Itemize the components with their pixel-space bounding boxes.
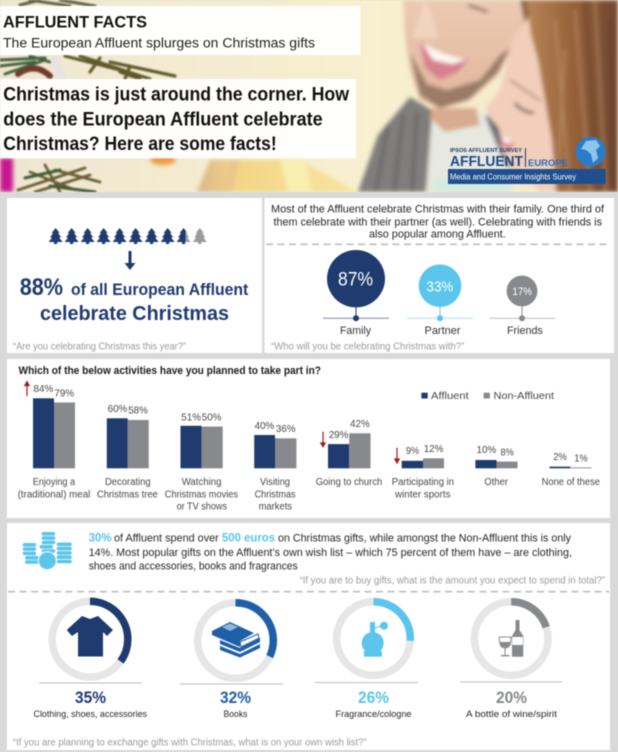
bars: watching movies: Christmas movies bbox=[165, 489, 238, 500]
bars: going to church: 29% bbox=[329, 429, 348, 441]
survey question: “If you are planning to exchange gifts with Christmas, what is on your own wish list?” bbox=[13, 738, 367, 749]
bars: other bbox=[475, 444, 518, 488]
header photo: couple with Christmas gift bbox=[0, 0, 618, 192]
arrow: red down, winter sports bbox=[395, 448, 399, 463]
bubble: partner 33%: Partner bbox=[424, 325, 461, 337]
logo: Affluent Europe: EUROPE bbox=[528, 158, 568, 169]
bars: winter sports bbox=[392, 443, 454, 500]
bars: winter sports: 9% bbox=[406, 445, 419, 457]
intro text bbox=[271, 204, 605, 241]
gift: clothing 35% bbox=[34, 601, 147, 720]
bars: enjoying a meal: 84% bbox=[34, 383, 53, 395]
bubble: friends 17% bbox=[490, 276, 555, 337]
text: spending: on Christmas gifts, while amongst the Non-Affluent this is only bbox=[278, 532, 571, 544]
bars: going to church: 42% bbox=[350, 418, 370, 430]
icon: wine bottle and glass bbox=[499, 620, 523, 657]
text: spending: 30% bbox=[89, 532, 112, 544]
legend: Non-Affluent bbox=[494, 390, 554, 402]
intro text: Most of the Affluent celebrate Christmas with their family. One third of bbox=[271, 204, 605, 216]
logo: Affluent Europe: IPSOS AFFLUENT SURVEY bbox=[450, 148, 522, 154]
bars: decorating tree: 60% bbox=[108, 403, 127, 415]
bars: winter sports: winter sports bbox=[394, 489, 450, 500]
survey question: “Who will you be celebrating Christmas with?” bbox=[271, 341, 464, 352]
header intro text box bbox=[0, 79, 356, 158]
icon: stacks of coins bbox=[23, 532, 72, 570]
headline: 88 percent: of all European Affluent bbox=[71, 280, 249, 299]
headline: 88 percent: celebrate Christmas bbox=[40, 302, 229, 325]
bars: enjoying a meal: (traditional) meal bbox=[18, 489, 90, 500]
legend bbox=[421, 390, 554, 402]
icon: t-shirt bbox=[67, 616, 113, 656]
gift: wine 20% bbox=[460, 602, 562, 720]
bars: enjoying a meal: 79% bbox=[54, 388, 74, 400]
bars: watching movies bbox=[165, 412, 238, 513]
chart title: Which of the below activities have you planned to take part in? bbox=[18, 365, 321, 377]
bubble: family 87%: 87% bbox=[338, 270, 373, 291]
gift: clothing 35%: Clothing, shoes, accessories bbox=[34, 709, 147, 720]
logo: Affluent Europe: Media and Consumer Insights Survey bbox=[450, 172, 576, 181]
bars: winter sports: 12% bbox=[424, 443, 443, 455]
bubble: partner 33% bbox=[407, 264, 473, 337]
panel: celebrate Christmas share bbox=[7, 198, 262, 353]
headline: 88 percent bbox=[20, 274, 249, 325]
gift: fragrance 26%: 26% bbox=[358, 689, 389, 707]
survey question: “Are you celebrating Christmas this year?” bbox=[13, 341, 186, 352]
bars: visiting markets: 40% bbox=[255, 420, 274, 432]
bars: decorating tree bbox=[97, 403, 158, 500]
bars: watching movies: 51% bbox=[181, 412, 201, 424]
icon: row of ten Christmas trees bbox=[49, 228, 207, 244]
bars: watching movies: 50% bbox=[202, 412, 222, 424]
bars: other: 8% bbox=[500, 447, 514, 459]
panel: planned activities bbox=[7, 359, 610, 518]
legend: Affluent bbox=[431, 390, 469, 402]
arrow: red down, church bbox=[321, 432, 325, 447]
arrow: red up, meal bbox=[25, 382, 29, 396]
header intro text box: does the European Affluent celebrate bbox=[3, 109, 323, 131]
bars: watching movies: Watching bbox=[182, 477, 222, 488]
header title box: AFFLUENT FACTS bbox=[3, 12, 147, 32]
logo: Affluent Europe bbox=[448, 137, 606, 184]
gift: books 32% bbox=[180, 603, 283, 720]
gift: fragrance 26% bbox=[315, 602, 418, 720]
bars: going to church bbox=[316, 418, 382, 488]
bars: visiting markets: markets bbox=[259, 502, 292, 513]
logo: Affluent Europe: AFFLUENT bbox=[450, 153, 523, 170]
icon: perfume bottle bbox=[362, 622, 388, 657]
bars: decorating tree: Decorating bbox=[105, 477, 151, 488]
bars: watching movies: or TV shows bbox=[177, 502, 227, 513]
intro text: them celebrate with their partner (as well). Celebrating with friends is bbox=[274, 216, 602, 228]
bars: none of these: 2% bbox=[553, 451, 567, 463]
bars: none of these: 1% bbox=[574, 453, 588, 465]
survey question: “If you are to buy gifts, what is the amount you expect to spend in total?” bbox=[300, 576, 605, 586]
bars: visiting markets: Christmas bbox=[255, 489, 296, 500]
panel: who they celebrate with bbox=[264, 198, 614, 353]
text: spending: shoes and accessories, books and fragrances bbox=[89, 560, 298, 572]
bubble: family 87% bbox=[323, 250, 389, 337]
bars: none of these bbox=[542, 451, 600, 488]
bars: visiting markets bbox=[254, 420, 296, 513]
icon: stack of books bbox=[212, 622, 260, 658]
bar chart bbox=[18, 383, 600, 513]
text: spending: 14%. Most popular gifts on the Affluent’s own wish list – which 75 percent of them have – are clothing, bbox=[89, 547, 572, 559]
header title box: The European Affluent splurges on Christmas gifts bbox=[3, 36, 315, 51]
gift: wine 20%: A bottle of wine/spirit bbox=[466, 709, 557, 720]
gift: wine 20%: 20% bbox=[496, 689, 527, 707]
bubble: friends 17%: Friends bbox=[507, 325, 543, 337]
bars: other: Other bbox=[484, 477, 509, 488]
text: spending: 500 euros bbox=[222, 532, 275, 544]
bars: enjoying a meal bbox=[18, 383, 90, 500]
bars: winter sports: Participating in bbox=[392, 477, 454, 488]
bars: decorating tree: 58% bbox=[128, 405, 148, 417]
bars: decorating tree: Christmas tree bbox=[97, 489, 158, 500]
bars: visiting markets: Visiting bbox=[260, 477, 290, 488]
bars: other: 10% bbox=[476, 444, 496, 456]
header intro text box: Christmas is just around the corner. How bbox=[3, 84, 350, 106]
bars: visiting markets: 36% bbox=[276, 423, 296, 435]
gift: books 32%: 32% bbox=[220, 689, 251, 707]
panel: gifts bbox=[7, 523, 610, 750]
intro text: also popular among Affluent. bbox=[369, 229, 506, 241]
gift: clothing 35%: 35% bbox=[75, 689, 106, 707]
text: spending bbox=[89, 532, 572, 572]
gift: fragrance 26%: Fragrance/cologne bbox=[336, 709, 412, 720]
text: spending: of Affluent spend over bbox=[114, 532, 219, 544]
arrow: down bbox=[124, 251, 136, 270]
bars: enjoying a meal: Enjoying a bbox=[33, 477, 75, 488]
header intro text box: Christmas? Here are some facts! bbox=[3, 133, 277, 155]
header title box bbox=[0, 6, 360, 55]
bars: none of these: None of these bbox=[542, 477, 600, 488]
gift: books 32%: Books bbox=[224, 709, 248, 720]
bars: going to church: Going to church bbox=[316, 477, 382, 488]
bubble: family 87%: Family bbox=[340, 325, 371, 337]
bubble: partner 33%: 33% bbox=[426, 279, 453, 296]
bubble: friends 17%: 17% bbox=[512, 286, 532, 298]
headline: 88 percent: 88% bbox=[20, 274, 63, 301]
